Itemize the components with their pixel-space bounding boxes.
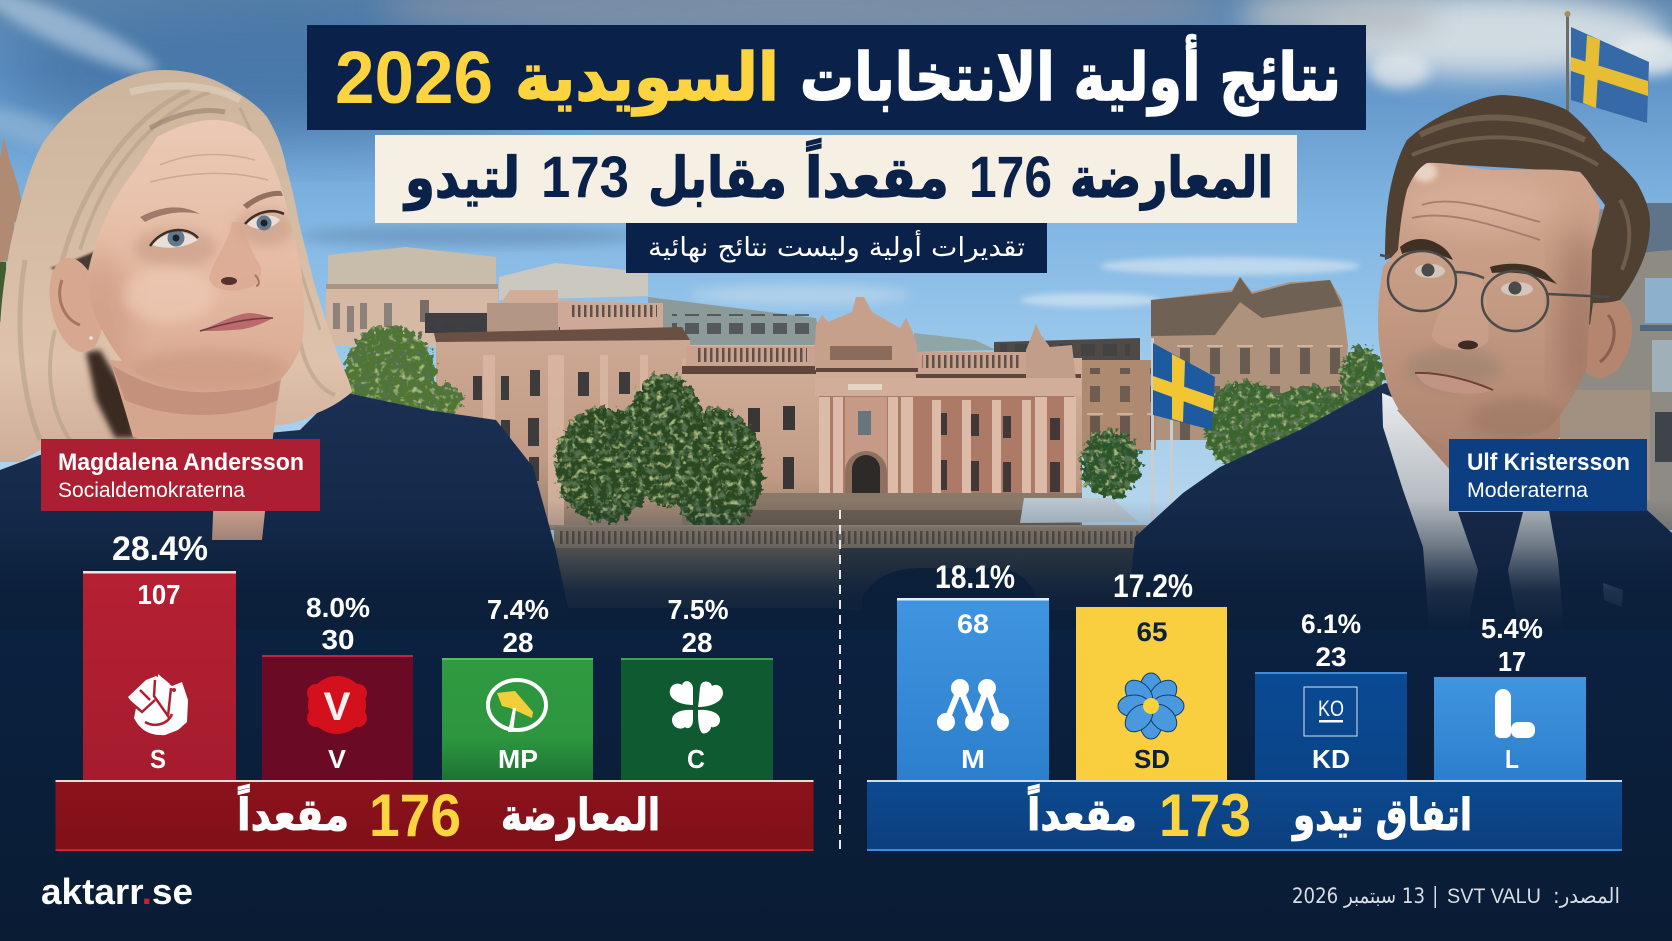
suit: [0, 393, 575, 640]
bar KD: 6.1%: [1301, 609, 1361, 639]
portico: [819, 395, 1074, 495]
opposition total band: 176: [369, 782, 461, 849]
icon: C clover: [670, 681, 723, 734]
icon: MP dandelion: [488, 680, 546, 732]
icon: SD flower: [1118, 673, 1184, 739]
hair: [1385, 95, 1650, 325]
bar KD: KD: [1312, 744, 1350, 774]
lips: [200, 313, 273, 331]
right background building: [1560, 203, 1672, 530]
bar chart: Tidö agreement: [897, 559, 1586, 780]
icon: KD square: [1304, 687, 1357, 736]
icon: S rose: [128, 674, 188, 735]
background: van and bridge: [520, 498, 1160, 612]
bar V: 30: [322, 624, 354, 655]
bar M: 68: [957, 609, 989, 639]
title white part: نتائج أولية الانتخابات: [800, 34, 1341, 117]
bar M: [897, 559, 1049, 780]
divider between blocs: [839, 510, 841, 851]
nose: [209, 222, 261, 291]
icon: KD square: KO: [1318, 696, 1344, 721]
glasses: [1380, 251, 1610, 331]
bar SD: 17.2%: [1113, 568, 1193, 604]
subtitle banner: 176: [969, 145, 1052, 210]
centre block: [682, 358, 1082, 530]
left pavilion: [425, 290, 690, 530]
centre windows: [746, 406, 795, 525]
eyes: [152, 232, 198, 248]
bar C: [621, 594, 773, 780]
bar S: S: [150, 744, 166, 774]
bar KD: 23: [1316, 642, 1346, 672]
icon: V rose: V: [324, 685, 351, 729]
Tidö total band: 173: [1159, 782, 1251, 849]
bar SD: 65: [1136, 617, 1168, 647]
source line: 13 سبتمبر 2026: [1292, 884, 1425, 908]
arched door and centre bay: [845, 397, 887, 495]
bar MP: MP: [498, 744, 538, 774]
right trees: [1080, 430, 1140, 498]
bar S: 28.4%: [112, 530, 208, 568]
subtitle banner: مقعداً: [805, 138, 949, 211]
hair: [0, 70, 352, 462]
Tidö total band: اتفاق تيدو: [1291, 790, 1472, 841]
portrait: Magdalena Andersson: [0, 70, 575, 640]
bar chart: opposition: [83, 530, 773, 780]
dark hair shadow: [86, 350, 135, 438]
bar L: [1434, 613, 1586, 780]
bar C: 28: [682, 627, 712, 658]
neck: [1397, 370, 1560, 470]
forehead wrinkles: [1412, 201, 1540, 240]
brows: [140, 207, 200, 222]
bar L: L: [1505, 744, 1519, 774]
bar M: M: [961, 744, 985, 774]
left tree: [344, 326, 464, 418]
source line: المصدر:: [1553, 884, 1620, 908]
subtitle banner: 173: [541, 145, 629, 210]
tie: [1458, 512, 1523, 640]
columns: [819, 397, 1076, 493]
face: [87, 120, 304, 391]
forehead lines: [150, 155, 268, 182]
mouth: [1415, 372, 1493, 394]
base: [682, 493, 1082, 530]
name card: Magdalena Andersson: Socialdemokraterna: [58, 479, 245, 502]
background: parliament building: [425, 290, 1156, 530]
face: [1378, 163, 1600, 447]
name card: Ulf Kristersson: Moderaterna: [1467, 479, 1588, 502]
neck and chest: [110, 360, 280, 540]
subtitle banner: [375, 135, 1297, 223]
top right swedish flag: [1564, 11, 1649, 123]
opposition total band: المعارضة: [501, 790, 660, 841]
bar M: 18.1%: [935, 559, 1015, 595]
lapel pin: [1603, 583, 1623, 607]
bar MP: [442, 594, 593, 780]
disclaimer strip: تقديرات أولية وليست نتائج نهائية: [648, 229, 1025, 263]
subtitle banner: المعارضة: [1070, 146, 1273, 211]
Tidö total band: مقعداً: [1027, 783, 1137, 841]
bar V: 8.0%: [306, 592, 370, 623]
earring: [89, 336, 93, 340]
nose: [1432, 275, 1489, 350]
right pavilion: [1026, 324, 1076, 380]
bar S: [83, 530, 236, 780]
bar S: 107: [138, 579, 180, 610]
suit: [1125, 383, 1672, 640]
bar SD: SD: [1134, 744, 1170, 774]
name card: Magdalena Andersson: Magdalena Andersson: [58, 449, 304, 476]
hair streaks: [20, 90, 335, 440]
opposition total band: [56, 780, 814, 851]
bar L: 17: [1498, 646, 1526, 677]
ear: [1570, 292, 1640, 384]
grey mansard roofs: [648, 297, 822, 345]
title block: [307, 25, 1366, 130]
disclaimer strip: [626, 223, 1047, 273]
left pavilion pilasters: [483, 355, 648, 525]
subtitle banner: مقابل: [648, 146, 787, 211]
bar V: V: [328, 744, 347, 774]
icon: M nodes: [939, 681, 1007, 729]
bar L: 5.4%: [1481, 613, 1543, 644]
Tidö total band: [867, 780, 1622, 851]
brand logo: aktarr.se: [41, 871, 193, 912]
shirt: [1382, 393, 1565, 640]
middle swedish flag: [1151, 338, 1215, 538]
title yellow part: السويدية: [515, 39, 779, 117]
opposition total band: مقعداً: [237, 783, 349, 841]
name card: Ulf Kristersson: [1449, 439, 1647, 511]
bar C: C: [687, 744, 705, 774]
centre trees: [555, 374, 763, 532]
bar KD: [1255, 609, 1407, 780]
bar MP: 7.4%: [487, 594, 549, 625]
icon: V rose: [307, 676, 367, 734]
subtitle banner: لتيدو: [402, 146, 520, 211]
bar SD: [1076, 568, 1227, 780]
far right block: [1076, 360, 1156, 450]
bar C: 7.5%: [668, 594, 729, 625]
portrait: Ulf Kristersson: [1125, 95, 1672, 640]
background: trees: [344, 326, 1384, 532]
central pediment: [815, 297, 917, 370]
background: far left tower: [0, 137, 21, 322]
background: rear left building: [326, 247, 648, 346]
bar V: [262, 592, 413, 780]
brows: [1400, 239, 1453, 260]
source line: SVT VALU: [1447, 885, 1541, 908]
name card: Magdalena Andersson: [41, 439, 320, 511]
background: sky with clouds: [0, 0, 1672, 600]
source line: [1292, 884, 1620, 908]
left pavilion windows: [470, 370, 630, 481]
name card: Ulf Kristersson: Ulf Kristersson: [1467, 449, 1630, 476]
bar MP: 28: [502, 627, 534, 658]
icon: L: [1495, 689, 1535, 738]
ear: [42, 253, 110, 357]
eyes: [1415, 264, 1445, 278]
background: rear right building: [1151, 277, 1348, 440]
bottom fade to navy: [0, 500, 1672, 941]
title year: 2026: [335, 36, 493, 119]
